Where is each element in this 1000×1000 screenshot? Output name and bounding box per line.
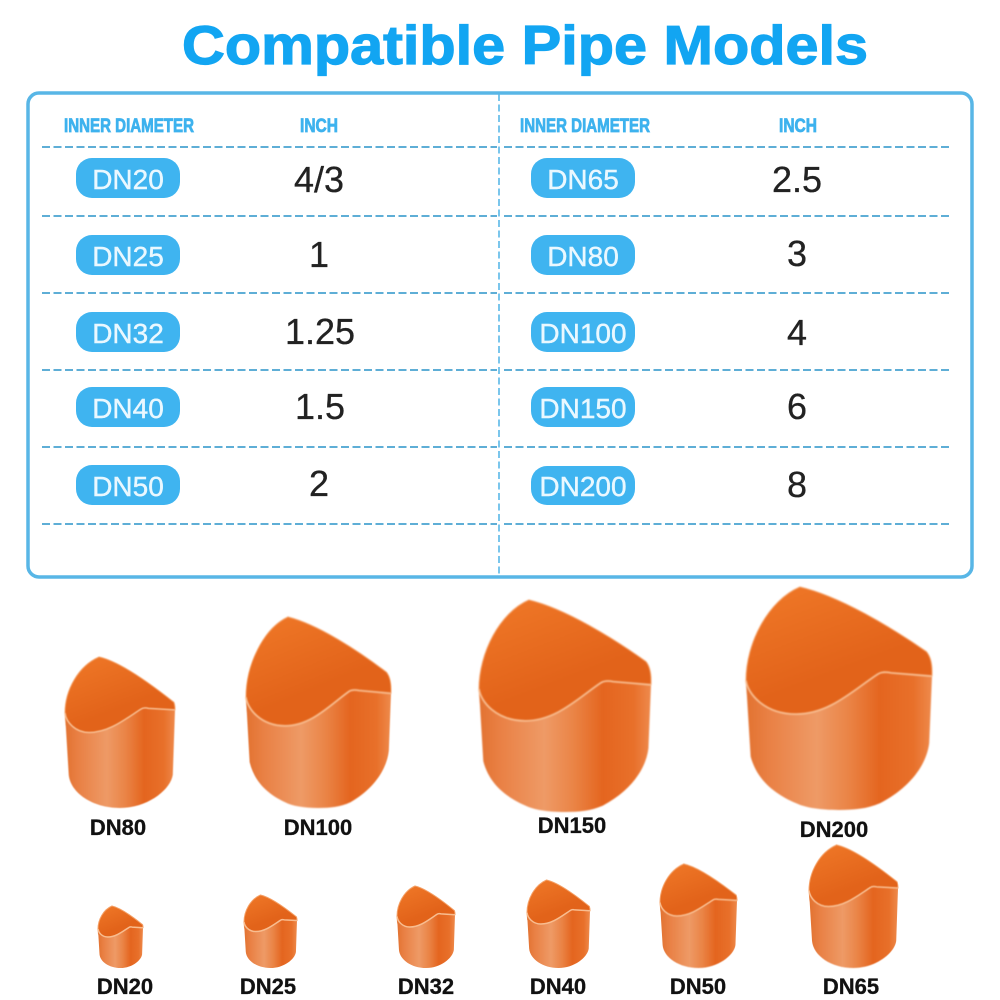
row: DN200: 8 <box>787 464 807 505</box>
row: DN32: DN32 <box>92 318 164 349</box>
header: left columns: INNER DIAMETER <box>64 116 194 137</box>
row: DN65 <box>531 158 822 200</box>
pipe cap: DN100 <box>246 617 391 840</box>
row: DN200: DN200 <box>539 471 627 502</box>
pipe cap: DN20 <box>97 906 153 999</box>
pipe cap: DN200: DN200 <box>800 817 868 842</box>
row: DN100: DN100 <box>539 318 627 349</box>
pipe cap: DN50 <box>660 864 737 999</box>
header: right columns: INCH <box>779 116 817 137</box>
row: DN150 <box>531 386 807 427</box>
row: DN25: 1 <box>309 234 329 275</box>
row: DN150: DN150 <box>539 393 627 424</box>
pipe cap: DN40 <box>527 880 590 999</box>
row: DN20: DN20 <box>92 164 164 195</box>
row: DN25: DN25 <box>92 241 164 272</box>
row: DN80: DN80 <box>547 241 619 272</box>
pipe cap: DN150 <box>479 600 651 838</box>
pipe cap: DN32 <box>397 886 455 999</box>
row: DN50: 2 <box>309 463 329 504</box>
row: DN50: DN50 <box>92 471 164 502</box>
row: DN32 <box>76 311 355 352</box>
pipe cap: DN80: DN80 <box>90 815 146 840</box>
pipe cap: DN200 <box>746 587 932 842</box>
header: left columns <box>64 116 338 137</box>
row: DN20 <box>76 158 344 200</box>
row: DN80: 3 <box>787 233 807 274</box>
row: DN40: DN40 <box>92 393 164 424</box>
title: Compatible Pipe Models <box>182 14 868 76</box>
row: DN40: 1.5 <box>295 386 345 427</box>
row: DN25 <box>76 234 329 275</box>
pipe cap: DN25: DN25 <box>240 974 296 999</box>
row: DN50 <box>76 463 329 505</box>
row: DN100 <box>531 312 807 353</box>
row: DN100: 4 <box>787 312 807 353</box>
row: DN65: 2.5 <box>772 159 822 200</box>
row: DN32: 1.25 <box>285 311 355 352</box>
pipe cap: DN40: DN40 <box>530 974 586 999</box>
pipe cap: DN50: DN50 <box>670 974 726 999</box>
pipe cap: DN65: DN65 <box>823 974 879 999</box>
header: right columns: INNER DIAMETER <box>520 116 650 137</box>
pipe cap: DN80 <box>65 657 175 840</box>
row: DN200 <box>531 464 807 505</box>
row: DN150: 6 <box>787 386 807 427</box>
header: right columns <box>520 116 817 137</box>
pipe cap: DN20: DN20 <box>97 974 153 999</box>
pipe cap: DN25 <box>240 895 297 999</box>
header: left columns: INCH <box>300 116 338 137</box>
row: DN20: 4/3 <box>294 159 344 200</box>
pipe cap: DN32: DN32 <box>398 974 454 999</box>
row: DN40 <box>76 386 345 427</box>
pipe cap: DN65 <box>809 845 898 999</box>
pipe cap: DN100: DN100 <box>284 815 352 840</box>
row: DN80 <box>531 233 807 275</box>
row: DN65: DN65 <box>547 164 619 195</box>
panel: pipe size table <box>28 93 972 577</box>
pipe cap: DN150: DN150 <box>538 813 606 838</box>
